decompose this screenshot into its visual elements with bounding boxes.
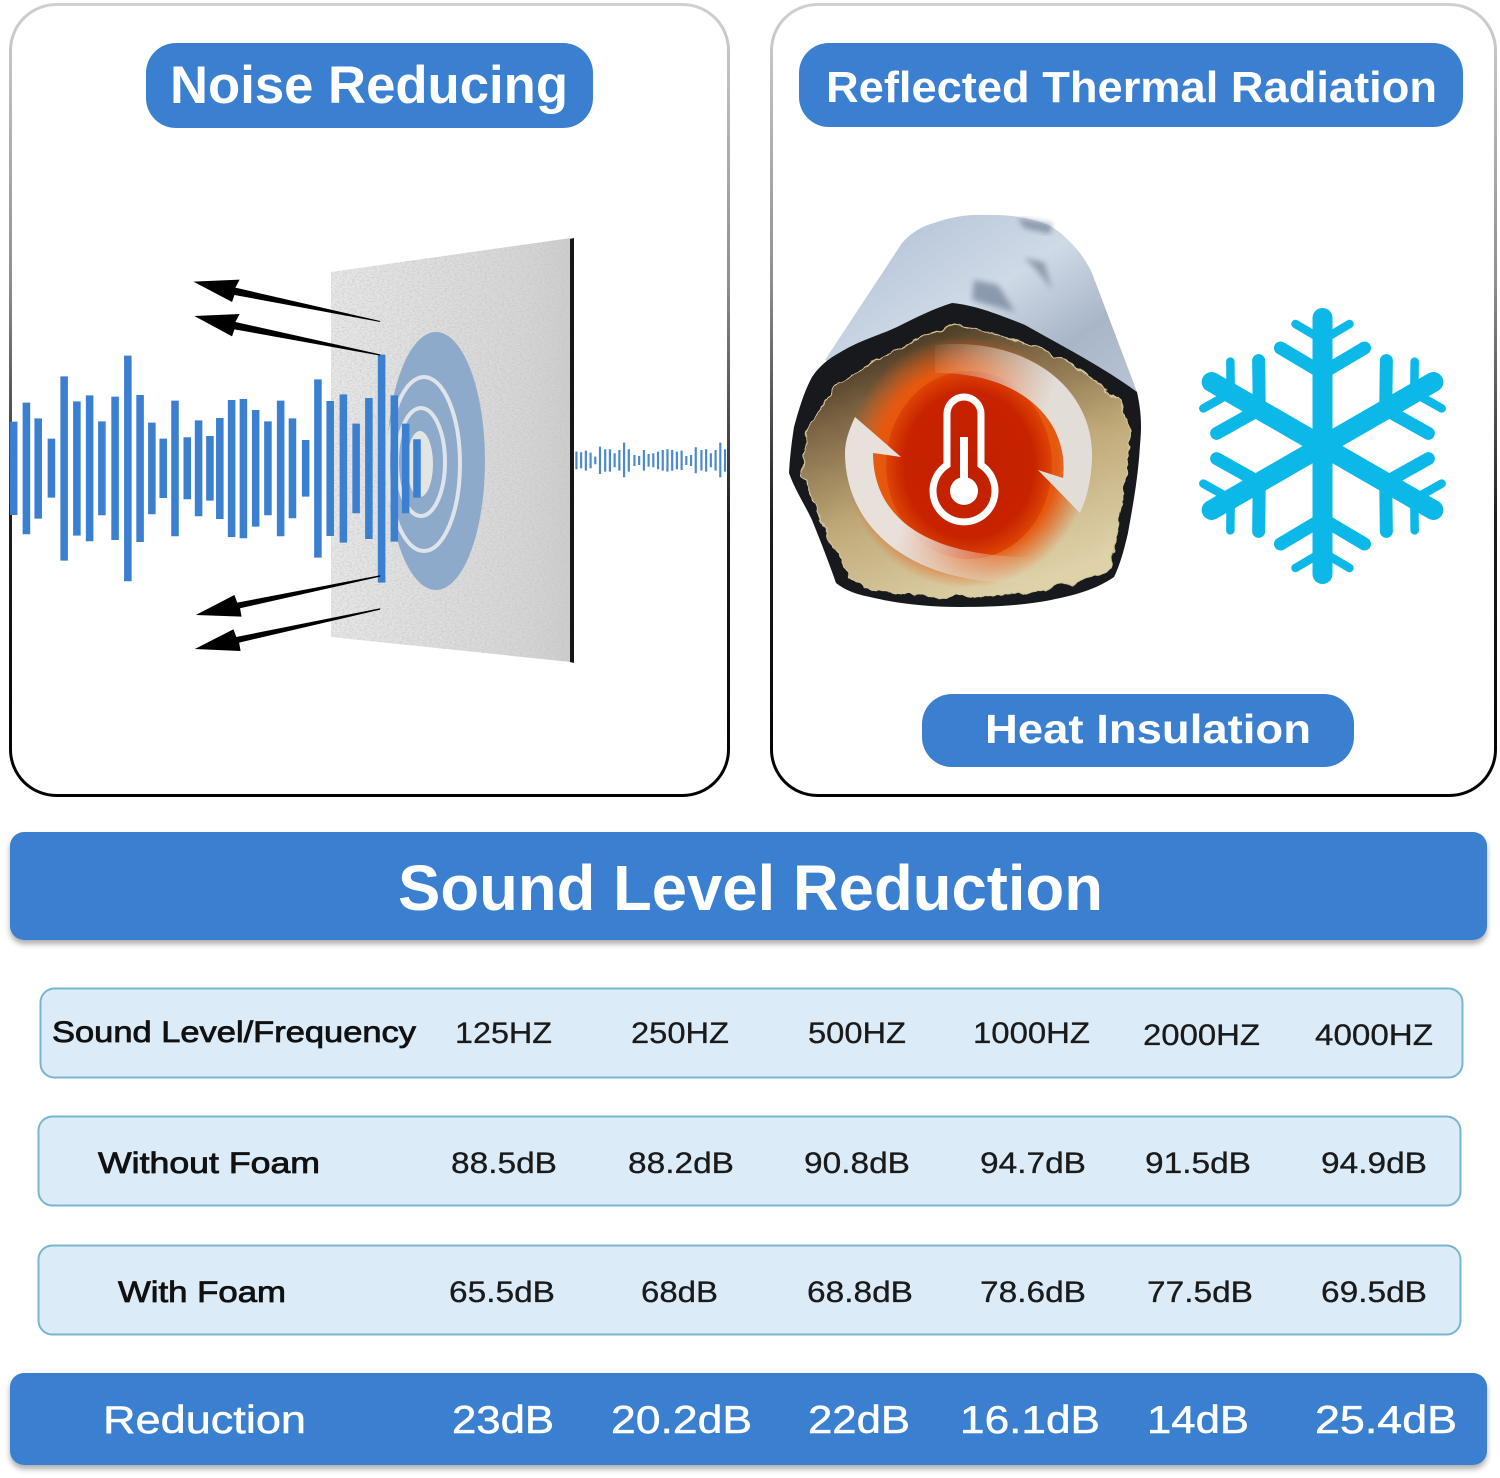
panel: thermal radiation and heat insulation xyxy=(772,4,1496,796)
table row: with foam xyxy=(38,1246,1460,1334)
table row: reduction: 20.2dB xyxy=(611,1399,752,1442)
table row: reduction: Reduction xyxy=(103,1399,306,1442)
transmitted reduced sound wave xyxy=(576,443,725,477)
table row: with foam: 69.5dB xyxy=(1321,1276,1427,1309)
panel frame xyxy=(772,4,1496,796)
title banner: Sound Level Reduction: Sound Level Reduction xyxy=(398,852,1103,924)
foam sheet xyxy=(331,238,574,663)
incoming sound wave xyxy=(14,355,417,583)
icon: thermometer xyxy=(933,397,995,522)
table row: with foam: 68.8dB xyxy=(807,1276,913,1309)
table row: reduction: 25.4dB xyxy=(1315,1399,1457,1442)
heading pill: Reflected Thermal Radiation xyxy=(799,43,1463,127)
table row: with foam: 68dB xyxy=(641,1276,718,1309)
table row: without foam xyxy=(38,1116,1460,1206)
label pill: Heat Insulation: Heat Insulation xyxy=(985,706,1311,752)
table row: without foam: 94.7dB xyxy=(980,1147,1086,1180)
table row: sound level / frequency xyxy=(40,988,1462,1078)
table row: sound level / frequency: 2000HZ xyxy=(1143,1019,1260,1052)
table row: reduction: 14dB xyxy=(1147,1399,1249,1442)
table row: without foam: 88.2dB xyxy=(628,1147,734,1180)
table row: without foam: 94.9dB xyxy=(1321,1147,1427,1180)
table row: without foam: 88.5dB xyxy=(451,1147,557,1180)
table row: sound level / frequency: 500HZ xyxy=(808,1017,906,1050)
table row: with foam: 65.5dB xyxy=(449,1276,555,1309)
heading pill: Noise Reducing: Noise Reducing xyxy=(170,56,568,115)
sound impact rings xyxy=(387,332,485,590)
table row: with foam: 78.6dB xyxy=(980,1276,1086,1309)
label pill: Heat Insulation xyxy=(922,694,1354,767)
circular arrows xyxy=(845,344,1092,582)
heading pill: Reflected Thermal Radiation: Reflected Thermal Radiation xyxy=(826,63,1437,112)
panel frame xyxy=(10,4,728,796)
table row: reduction: 16.1dB xyxy=(960,1399,1100,1442)
heading pill: Noise Reducing xyxy=(146,43,593,128)
arrows: reflected sound xyxy=(193,280,380,651)
table row: sound level / frequency: 125HZ xyxy=(455,1017,552,1050)
table row: sound level / frequency: 1000HZ xyxy=(973,1017,1090,1050)
table row: sound level / frequency: Sound Level/Frequency xyxy=(52,1016,416,1049)
table row: with foam: With Foam xyxy=(118,1276,286,1309)
table row: with foam: 77.5dB xyxy=(1147,1276,1253,1309)
icon: snowflake xyxy=(1191,318,1454,574)
table row: without foam: 90.8dB xyxy=(804,1147,910,1180)
table row: reduction: 22dB xyxy=(808,1399,910,1442)
table row: reduction: 23dB xyxy=(452,1399,554,1442)
table row: reduction xyxy=(10,1373,1487,1465)
table row: sound level / frequency: 250HZ xyxy=(631,1017,729,1050)
duct tube with foil wrap xyxy=(789,215,1141,607)
table row: without foam: 91.5dB xyxy=(1145,1147,1251,1180)
title banner: Sound Level Reduction xyxy=(10,832,1487,940)
table row: sound level / frequency: 4000HZ xyxy=(1315,1019,1433,1052)
table row: without foam: Without Foam xyxy=(98,1147,320,1180)
panel: noise reducing xyxy=(10,4,728,796)
